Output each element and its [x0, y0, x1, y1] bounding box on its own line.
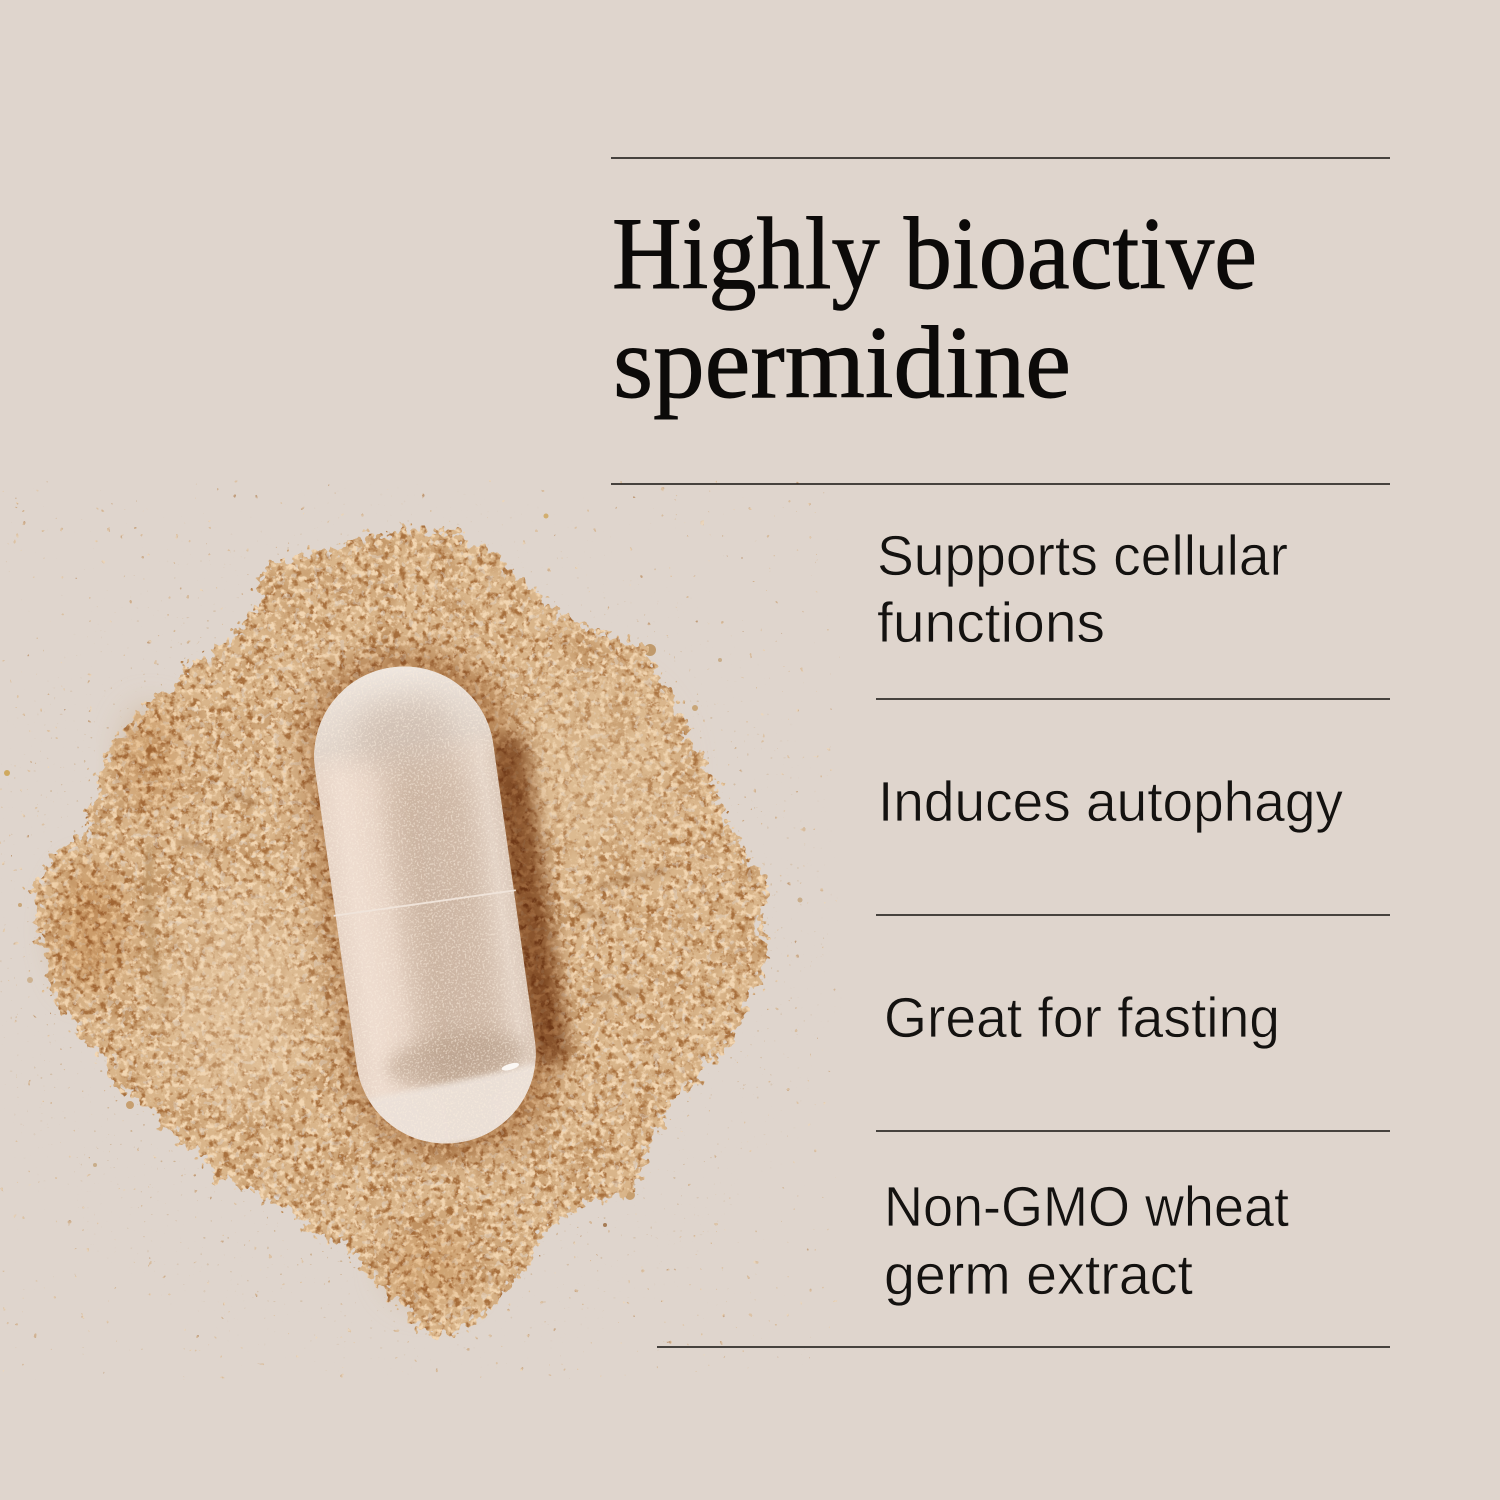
crevices — [180, 790, 668, 1000]
scattered powder particles — [0, 480, 860, 1380]
capsule hollow shadow — [290, 637, 571, 1171]
benefit: autophagy: Induces autophagy — [878, 770, 1343, 834]
light mounds — [510, 680, 670, 860]
right-hand capsule shadow — [490, 734, 571, 1066]
bottom light dome — [368, 1062, 536, 1144]
benefit: wheat germ: germ extract — [884, 1243, 1193, 1307]
top translucent dome — [314, 666, 494, 767]
infographic canvas — [0, 157, 1390, 1380]
benefit: wheat germ — [884, 1175, 1289, 1307]
pile textured body — [36, 527, 770, 1335]
capsule grain — [314, 666, 536, 1144]
benefit list — [877, 524, 1343, 1307]
benefit: cellular functions: functions — [877, 591, 1105, 655]
capsule — [314, 666, 536, 1144]
benefit: cellular functions — [877, 524, 1288, 655]
capsule contents shading — [377, 773, 510, 1046]
capsule dome highlight — [501, 1061, 520, 1072]
benefit: fasting: Great for fasting — [884, 986, 1280, 1050]
heading rules — [611, 158, 1390, 484]
title: spermidine — [613, 306, 1071, 420]
pile shading — [54, 637, 670, 1305]
benefit: wheat germ: Non-GMO wheat — [884, 1175, 1289, 1239]
capsule seam — [334, 890, 516, 916]
title: Highly bioactive — [612, 197, 1257, 311]
title — [612, 197, 1257, 420]
benefit: cellular functions: Supports cellular — [877, 524, 1288, 588]
list rules — [657, 699, 1390, 1347]
capsule shell — [302, 655, 548, 1155]
ridge shadow — [148, 845, 165, 1010]
powder pile — [36, 527, 770, 1335]
